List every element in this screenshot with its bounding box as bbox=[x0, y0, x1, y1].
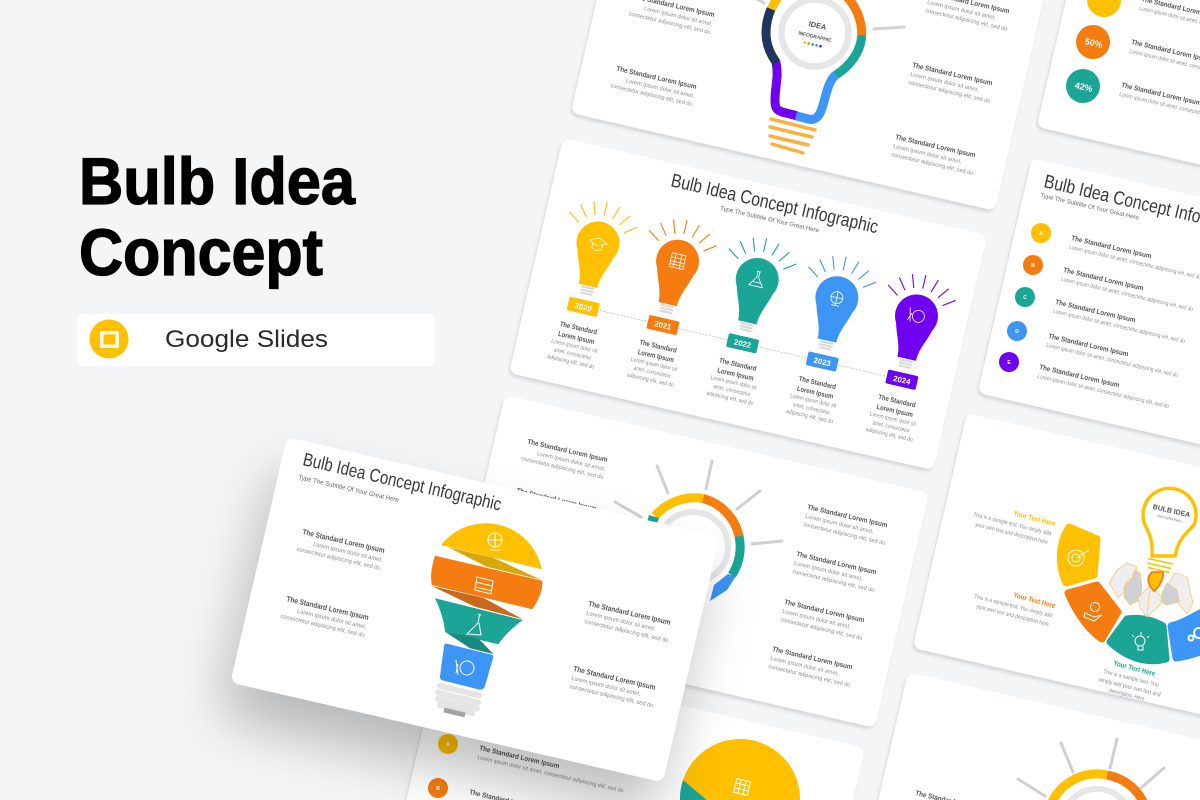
rays bbox=[615, 461, 782, 544]
bulb 2023: The Standard bbox=[798, 376, 837, 391]
text: orange: your own text and description here. bbox=[976, 604, 1051, 628]
segment: orange bbox=[431, 556, 542, 609]
list item A: The Standard Lorem Ipsum bbox=[479, 745, 560, 770]
panel: sun bulb slide: The Standard Lorem Ipsum bbox=[772, 646, 853, 671]
text block: right 1: consectetur adipiscing elit, sed do bbox=[584, 619, 669, 644]
fold: yellow bbox=[448, 547, 542, 580]
icon: rocket flame bbox=[1148, 572, 1163, 591]
list text: The Standard Lorem Ipsum bbox=[1071, 235, 1152, 260]
bulb 2021: The Standard bbox=[639, 339, 677, 355]
segment: orange bbox=[1068, 585, 1118, 639]
bulb label: BULB IDEA bbox=[1152, 504, 1191, 519]
panel: sun bulb slide: Lorem ipsum dolor sit amet, bbox=[805, 514, 874, 536]
rays bbox=[757, 0, 904, 29]
bulb 2020 bbox=[536, 194, 641, 373]
list markers: E bbox=[1007, 360, 1011, 366]
list text: The Standard Lorem Ipsum bbox=[1063, 267, 1144, 292]
text block: right 1: Lorem ipsum dolor sit amet, bbox=[586, 611, 656, 633]
panel: sun bulb slide: The Standard Lorem Ipsum bbox=[807, 504, 888, 529]
panel: top outline bulb slide: Lorem ipsum dolor sit amet, bbox=[893, 144, 962, 166]
bulb 2024: 2024 bbox=[892, 374, 912, 387]
segment: yellow bbox=[441, 523, 542, 569]
rays bbox=[1018, 739, 1164, 796]
text blocks bbox=[521, 438, 608, 481]
text block: left 2 bbox=[280, 594, 370, 639]
bulb 2021: Lorem Ipsum bbox=[637, 349, 675, 364]
list text: Lorem ipsum dolor sit amet, consectetur adipiscing elit, sed do bbox=[1037, 374, 1169, 410]
bulb 2020: Lorem ipsum dolor sit bbox=[551, 339, 598, 355]
bulb 2022: amet, consectetur bbox=[712, 384, 751, 398]
icon: outline bulb bbox=[766, 0, 862, 119]
bulb 2024: amet, consectetur bbox=[872, 420, 910, 435]
bulb ring bbox=[1052, 774, 1145, 800]
bulb 2023: Lorem Ipsum bbox=[796, 386, 834, 401]
list markers: B bbox=[1031, 263, 1035, 269]
list text: The Standard Lorem Ipsum bbox=[1048, 333, 1129, 358]
bulb 2024: Lorem Ipsum bbox=[876, 404, 913, 419]
list markers bbox=[999, 223, 1051, 372]
list text: Lorem ipsum dolor sit amet, consectetur adipiscing elit, sed do bbox=[1046, 343, 1178, 379]
list markers: D bbox=[1015, 329, 1019, 335]
circle: 50% bbox=[1076, 25, 1110, 59]
bulb 2020: 2020 bbox=[574, 301, 593, 314]
panel: top outline bulb slide: consectetur adipiscing elit, sed do bbox=[908, 80, 991, 105]
panel: bottom pie slide bbox=[387, 650, 865, 800]
bulb 2021: 2021 bbox=[653, 319, 673, 332]
panel: bottom right slide bbox=[854, 672, 1200, 800]
text: orange: Your Text Here bbox=[1012, 590, 1056, 610]
list text bbox=[1037, 235, 1200, 410]
circle: yellow bbox=[1087, 0, 1121, 17]
text block: right 1 bbox=[584, 599, 674, 644]
bulb 2021: Lorem ipsum dolor sit bbox=[630, 357, 678, 373]
panel: sun bulb slide: consectetur adipiscing elit, sed do bbox=[803, 522, 886, 547]
bulb 2023: 2023 bbox=[813, 356, 832, 368]
ring label: IDEA bbox=[808, 19, 828, 32]
text block: right 2: The Standard Lorem Ipsum bbox=[573, 664, 657, 692]
bulb 2024: adipiscing elit, sed do bbox=[865, 427, 913, 444]
slide title: Bulb Idea Concept Infographic bbox=[301, 448, 504, 515]
text: teal: Your Text Here bbox=[1112, 658, 1156, 678]
bulb 2024: Lorem ipsum dolor sit bbox=[869, 412, 917, 428]
bulb 2024: The Standard bbox=[878, 394, 916, 409]
text: yellow: your own text and description here. bbox=[975, 522, 1050, 546]
bulb 2022 bbox=[695, 231, 800, 409]
text blocks: Lorem ipsum dolor sit amet, bbox=[643, 6, 713, 28]
panel: sun bulb slide: consectetur adipiscing elit, sed do bbox=[792, 569, 875, 594]
front slide shadow bbox=[219, 470, 709, 800]
text block: right 2 bbox=[569, 664, 659, 709]
bulb 2021: amet, consectetur bbox=[633, 366, 671, 380]
panel: timeline slide bbox=[509, 138, 987, 470]
list text: The Standard Lorem Ipsum bbox=[1039, 364, 1120, 389]
panel: top outline bulb slide: Lorem ipsum dolor sit amet, bbox=[625, 78, 695, 100]
circle: 42%: 42% bbox=[1074, 80, 1094, 94]
panel: sun bulb slide: Lorem ipsum dolor sit amet, bbox=[794, 561, 863, 583]
pie chart bbox=[680, 739, 800, 800]
panel: list slide bbox=[978, 158, 1200, 491]
text: teal: This is a sample text. You bbox=[1103, 669, 1159, 689]
panel: top outline bulb slide: consectetur adipiscing elit, sed do bbox=[891, 152, 974, 177]
text: yellow: This is a sample text. You simply add bbox=[973, 512, 1052, 537]
text block: left 2: consectetur adipiscing elit, sed do bbox=[280, 614, 366, 639]
bulb 2022: Lorem Ipsum bbox=[717, 367, 754, 382]
text blocks: consectetur adipiscing elit, sed do bbox=[521, 456, 604, 481]
google slides badge: Google Slides bbox=[165, 326, 328, 353]
panel: top outline bulb slide: Lorem ipsum dolor sit amet, bbox=[910, 72, 979, 94]
panel: top outline bulb slide: The Standard Lorem Ipsum bbox=[895, 134, 976, 159]
panel: sun bulb slide: The Standard Lorem Ipsum bbox=[796, 551, 877, 576]
bulb 2021: adipiscing elit, sed do bbox=[626, 372, 674, 389]
ring label bbox=[796, 17, 836, 50]
panel: top outline bulb slide bbox=[571, 0, 1049, 211]
list item A bbox=[438, 734, 626, 794]
ring label: INFOGRAPHIC bbox=[798, 31, 832, 44]
panel: sun bulb slide: The Standard Lorem Ipsum bbox=[784, 599, 865, 624]
slide subtitle: Type The Subtitle Of Your Great Here bbox=[298, 474, 400, 504]
text blocks bbox=[628, 0, 715, 36]
segmented bulb bbox=[431, 523, 542, 715]
bulb 2023 bbox=[775, 249, 880, 428]
text blocks: consectetur adipiscing elit, sed do bbox=[628, 11, 711, 36]
panel: top outline bulb slide: The Standard Lorem Ipsum bbox=[912, 62, 993, 87]
bulb 2023: amet, consectetur bbox=[792, 402, 831, 416]
panel: sun bulb slide: consectetur adipiscing elit, sed do bbox=[768, 664, 851, 689]
text blocks: The Standard Lorem Ipsum bbox=[527, 439, 608, 464]
text block: left 1: consectetur adipiscing elit, sed do bbox=[296, 547, 382, 572]
bulb 2020: adipiscing elit, sed do bbox=[547, 354, 595, 371]
panel: percent slide bbox=[1037, 0, 1200, 225]
google slides badge bbox=[77, 314, 435, 366]
circle: 50%: 50% bbox=[1084, 36, 1104, 50]
list item A: Lorem ipsum dolor sit amet, consectetur adipiscing elit, sed do bbox=[477, 755, 624, 794]
bulb screw lines bbox=[770, 119, 815, 153]
inner ring bbox=[782, 0, 848, 66]
bulb 2022: Lorem ipsum dolor sit bbox=[710, 375, 757, 391]
text block: right 1: The Standard Lorem Ipsum bbox=[588, 599, 672, 627]
main title bbox=[79, 144, 356, 289]
slide subtitle: Type The Subtitle Of Your Great Here bbox=[719, 205, 820, 234]
segment: yellow bbox=[1060, 527, 1097, 583]
bulb socket bbox=[438, 686, 479, 713]
text block: right 2: consectetur adipiscing elit, sed do bbox=[569, 684, 654, 709]
slide title: Bulb Idea Concept Infographic bbox=[669, 170, 880, 238]
bulb cap bbox=[444, 710, 465, 715]
bulb 2023: Lorem ipsum dolor sit bbox=[790, 393, 837, 410]
text block: left 2: Lorem ipsum dolor sit amet, bbox=[296, 609, 367, 631]
bulb 2024 bbox=[855, 267, 960, 446]
panel: sun bulb slide: Lorem ipsum dolor sit amet, bbox=[770, 656, 839, 678]
panel: rocket slide bbox=[913, 413, 1200, 746]
panel: sun bulb slide: Lorem ipsum dolor sit amet, bbox=[782, 609, 851, 631]
bulb ring bbox=[647, 498, 740, 601]
panel: sun bulb slide bbox=[451, 395, 929, 728]
segment: blue bbox=[440, 644, 493, 690]
panel: top outline bulb slide: consectetur adipiscing elit, sed do bbox=[925, 8, 1008, 33]
text: teal: description. Here bbox=[1109, 688, 1145, 703]
panel: front bulb slide bbox=[230, 437, 720, 782]
text: teal bbox=[1098, 658, 1161, 703]
bulb 2020: amet, consectetur bbox=[553, 347, 592, 362]
text: yellow bbox=[973, 508, 1056, 546]
bulb 2022: 2022 bbox=[733, 337, 753, 350]
panel: top outline bulb slide: The Standard Lorem Ipsum bbox=[616, 66, 697, 91]
panel: top outline bulb slide: consectetur adipiscing elit, sed do bbox=[610, 83, 693, 108]
list markers: C bbox=[1023, 295, 1027, 301]
bulb label: INFOGRAPHIC bbox=[1157, 514, 1183, 524]
slide subtitle: Type The Subtitle Of Your Great Here bbox=[1040, 192, 1140, 222]
panel: top outline bulb slide: Lorem ipsum dolor sit amet, bbox=[927, 0, 996, 22]
list item A: A bbox=[446, 742, 450, 748]
text: orange: This is a sample text. You simply add bbox=[974, 594, 1053, 619]
bulb 2022: The Standard bbox=[718, 358, 757, 373]
text: teal: simply add your own text and bbox=[1098, 677, 1161, 698]
segment: blue bbox=[1171, 612, 1200, 658]
panel: sun bulb slide: consectetur adipiscing elit, sed do bbox=[780, 617, 863, 642]
circle: 42% bbox=[1066, 69, 1100, 103]
dashed timeline bbox=[583, 307, 902, 380]
panel: sun bulb slide: The Standard Lorem Ipsum bbox=[516, 488, 597, 513]
text block: left 2: The Standard Lorem Ipsum bbox=[286, 594, 370, 622]
text: yellow: Your Text Here bbox=[1012, 508, 1056, 528]
icon: yellow outline bulb bbox=[1143, 488, 1196, 572]
text: orange bbox=[974, 590, 1056, 628]
bulb 2021 bbox=[616, 213, 721, 391]
segment: teal bbox=[435, 598, 523, 644]
segment: teal bbox=[1110, 618, 1166, 661]
text block: left 1: Lorem ipsum dolor sit amet, bbox=[312, 542, 383, 564]
list text: The Standard Lorem Ipsum bbox=[1055, 299, 1136, 324]
bulb 2020: The Standard bbox=[559, 321, 598, 336]
text block: left 1 bbox=[296, 527, 386, 572]
list item B: B bbox=[436, 786, 440, 792]
fold: orange bbox=[432, 586, 523, 619]
bulb 2022: adipiscing elit, sed do bbox=[706, 391, 754, 407]
text blocks: Lorem ipsum dolor sit amet, bbox=[536, 451, 606, 473]
list markers: A bbox=[1039, 231, 1043, 237]
petals bbox=[1109, 563, 1193, 617]
text block: right 2: Lorem ipsum dolor sit amet, bbox=[571, 676, 641, 698]
main title: Concept bbox=[79, 215, 323, 289]
bulb 2020: Lorem Ipsum bbox=[557, 331, 595, 346]
list item B bbox=[428, 778, 550, 800]
main title: Bulb Idea bbox=[79, 144, 356, 218]
fold: teal bbox=[445, 632, 493, 654]
text block: left 1: The Standard Lorem Ipsum bbox=[302, 527, 386, 555]
bulb 2023: adipiscing elit, sed do bbox=[785, 409, 834, 425]
